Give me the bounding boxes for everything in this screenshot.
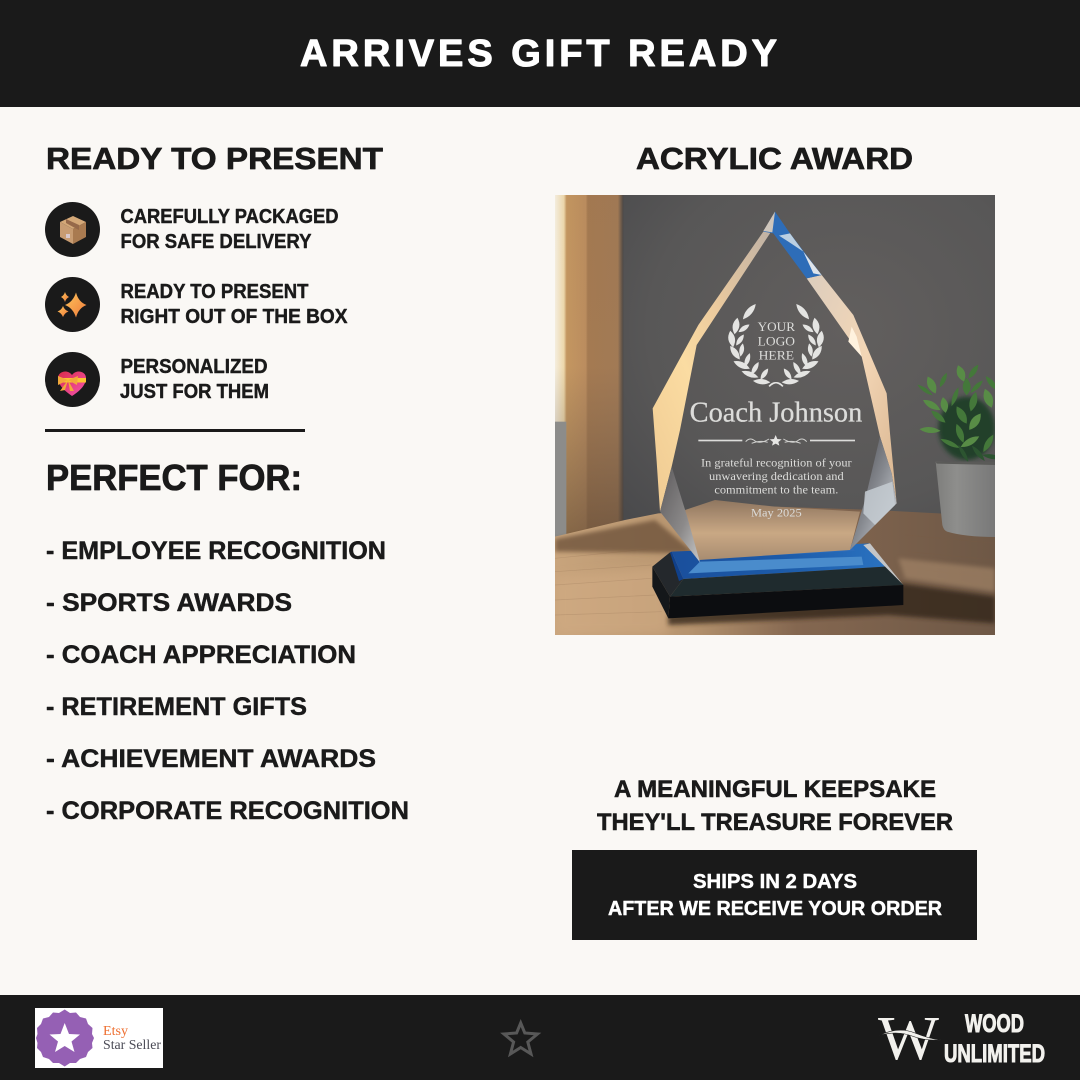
lower left facet [660, 467, 700, 562]
keepsake message [597, 776, 953, 836]
logo: wood unlimited [878, 1005, 1045, 1073]
list: occasions: - RETIREMENT GIFTS [46, 693, 307, 721]
dedication message [701, 458, 852, 496]
curtain [555, 195, 623, 538]
feature: carefully packaged [45, 202, 338, 257]
heading: ready to present: READY TO PRESENT [46, 141, 383, 176]
plant [916, 363, 1001, 537]
badge: etsy star seller [35, 1008, 163, 1068]
shipping callout: AFTER WE RECEIVE YOUR ORDER [608, 898, 943, 920]
dedication message: commitment to the team. [714, 484, 839, 496]
heading: perfect for: PERFECT FOR: [46, 457, 302, 498]
dedication message: In grateful recognition of your [701, 458, 852, 470]
icon: package [60, 216, 86, 244]
feature: personalized [45, 352, 269, 407]
shipping callout: SHIPS IN 2 DAYS [693, 871, 857, 893]
text: ready to present: READY TO PRESENT [120, 281, 308, 303]
panel: ready to present [45, 141, 383, 407]
logo placeholder text [758, 319, 795, 363]
list: occasions [46, 537, 409, 825]
recipient name: Coach Johnson [690, 397, 862, 429]
text: personalized: PERSONALIZED [120, 356, 268, 378]
logo mark: W: W [878, 1005, 939, 1073]
icon: purple star badge [36, 1010, 94, 1066]
list: occasions: - EMPLOYEE RECOGNITION [46, 537, 386, 565]
icon: sparkles [58, 292, 86, 318]
ornamental divider [698, 435, 855, 446]
dedication message: unwavering dedication and [709, 471, 844, 483]
icon: outline star [504, 1023, 538, 1054]
badge: etsy star seller: Star Seller [103, 1038, 161, 1053]
title: ARRIVES GIFT READY [300, 33, 777, 75]
laurel wreath [727, 302, 825, 386]
list: occasions: - COACH APPRECIATION [46, 641, 356, 669]
heading: acrylic award: ACRYLIC AWARD [636, 141, 913, 176]
award face [685, 500, 860, 560]
left bevel [653, 212, 775, 512]
logo placeholder text: YOUR [758, 319, 795, 334]
award base [652, 543, 903, 618]
text: carefully packaged: FOR SAFE DELIVERY [120, 231, 312, 253]
date: May 2025 [751, 508, 802, 520]
footer bar [0, 995, 1080, 1080]
list: occasions: - ACHIEVEMENT AWARDS [46, 745, 376, 773]
feature: ready to present [45, 277, 348, 332]
table [555, 507, 995, 635]
list: occasions: - SPORTS AWARDS [46, 589, 292, 617]
text: carefully packaged: CAREFULLY PACKAGED [120, 206, 338, 228]
blue tip [763, 212, 822, 278]
text: personalized: JUST FOR THEM [120, 381, 269, 403]
header banner [0, 0, 1080, 107]
logo: wood unlimited: WOOD [965, 1010, 1024, 1038]
list: occasions: - CORPORATE RECOGNITION [46, 797, 409, 825]
plant pot [936, 462, 995, 537]
keepsake message: THEY'LL TREASURE FOREVER [597, 809, 953, 836]
panel: perfect for [46, 457, 409, 825]
wall [618, 195, 995, 532]
logo placeholder text: LOGO [758, 333, 795, 348]
icon: gift heart [58, 371, 86, 396]
badge: etsy star seller: Etsy [103, 1024, 128, 1039]
keepsake message: A MEANINGFUL KEEPSAKE [614, 776, 936, 803]
right bevel [807, 275, 897, 503]
logo: wood unlimited: UNLIMITED [944, 1040, 1045, 1068]
engraving [690, 302, 862, 520]
acrylic award [653, 212, 897, 562]
lower right facet [850, 437, 897, 550]
shipping callout [572, 850, 977, 940]
text: ready to present: RIGHT OUT OF THE BOX [120, 306, 348, 328]
logo placeholder text: HERE [759, 348, 794, 363]
photo: acrylic award on table [555, 195, 995, 635]
